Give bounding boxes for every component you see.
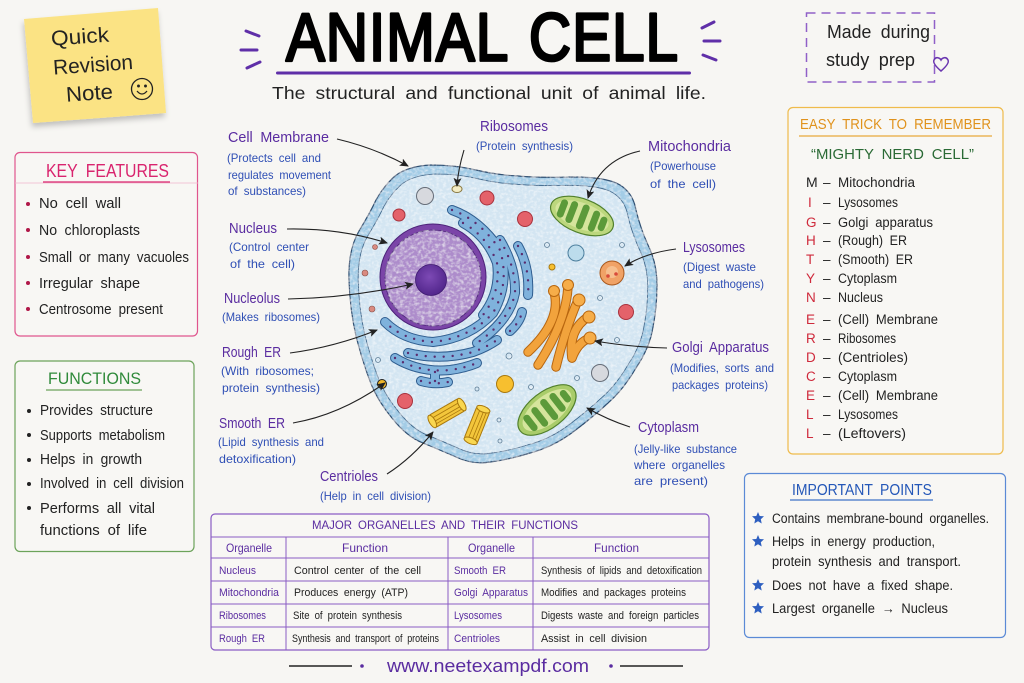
table rows: Rough ER <box>219 633 265 645</box>
bullet list: functions <box>27 403 184 539</box>
panel: easy trick to remember <box>788 108 1003 454</box>
table header <box>226 541 639 555</box>
points list: Helps in energy production, <box>772 534 935 549</box>
mnemonic list: (Centrioles) <box>838 350 908 365</box>
table: major organelles and their functions <box>211 514 709 650</box>
mnemonic list: (Smooth) ER <box>838 252 913 267</box>
sticky note: quick revision note: Quick <box>50 24 110 51</box>
label: cytoplasm: where organelles <box>633 458 725 472</box>
label: centrioles: Centrioles <box>320 469 378 485</box>
label: lysosomes: and pathogens) <box>683 277 764 291</box>
label: nucleus <box>229 221 309 271</box>
bullet list: functions: Involved in cell division <box>40 476 184 492</box>
icon: heart <box>934 58 948 71</box>
cell membrane <box>349 165 657 463</box>
label: rough ER: Rough ER <box>222 345 281 361</box>
panel: functions <box>15 361 194 552</box>
table rows: Digests waste and foreign particles <box>541 610 699 622</box>
table rows: Golgi Apparatus <box>454 587 528 599</box>
label: cell membrane: (Protects cell and <box>227 151 321 165</box>
label: ribosomes: Ribosomes <box>480 119 548 135</box>
centrioles <box>426 397 491 446</box>
label: smooth ER: (Lipid synthesis and <box>218 435 324 449</box>
nucleus <box>380 224 486 330</box>
note: made during study prep: study prep <box>826 50 915 70</box>
label: ribosomes: (Protein synthesis) <box>476 139 573 153</box>
label: golgi apparatus: packages proteins) <box>672 378 768 392</box>
table rows <box>219 565 702 645</box>
table rows: Ribosomes <box>219 610 266 622</box>
mnemonic list: – <box>823 215 831 230</box>
mnemonic list: D <box>806 350 816 365</box>
panel: important points: IMPORTANT POINTS <box>792 482 932 499</box>
table header: Function <box>594 541 639 555</box>
mnemonic list: – <box>823 426 831 441</box>
mnemonic heading: “MIGHTY NERD CELL” <box>811 147 974 163</box>
mitochondrion lower <box>509 375 585 445</box>
points list: protein synthesis and transport. <box>772 554 961 569</box>
mnemonic list: (Rough) ER <box>838 233 907 248</box>
bullet list: key features: No chloroplasts <box>39 223 140 239</box>
label: mitochondria: Mitochondria <box>648 139 732 155</box>
table rows: Nucleus <box>219 565 256 577</box>
bullet list: functions: Performs all vital <box>40 501 155 517</box>
arrows <box>287 139 676 474</box>
mnemonic list: – <box>823 233 831 248</box>
icon: stars <box>752 512 764 614</box>
icon: title accent strokes <box>241 22 720 68</box>
bullet list: key features <box>26 196 189 318</box>
label: golgi apparatus: (Modifies, sorts and <box>670 361 774 375</box>
label: cell membrane <box>227 130 332 198</box>
bullet list: key features: Small or many vacuoles <box>39 250 189 266</box>
table header: Function <box>342 541 388 555</box>
label: rough ER: (With ribosomes; <box>221 364 314 378</box>
table rows: Produces energy (ATP) <box>294 587 408 599</box>
panel: key features: KEY FEATURES <box>46 161 169 181</box>
table header: Organelle <box>468 541 515 555</box>
table rows: Lysosomes <box>454 610 502 622</box>
label: rough ER <box>221 345 320 395</box>
bullet list: functions: Provides structure <box>40 403 153 419</box>
sticky note: quick revision note: Note <box>65 80 114 107</box>
mnemonic list: I <box>808 195 812 210</box>
mnemonic list: E <box>806 312 815 327</box>
table rows: Synthesis and transport of proteins <box>292 633 439 645</box>
panel: functions: FUNCTIONS <box>48 369 141 388</box>
table rows: Control center of the cell <box>294 565 421 577</box>
bullet list: functions: Helps in growth <box>40 452 142 468</box>
table rows: Site of protein synthesis <box>293 610 402 622</box>
golgi apparatus <box>528 280 596 367</box>
table: major organelles and their functions: MAJOR ORGANELLES AND THEIR FUNCTIONS <box>312 520 578 532</box>
mnemonic list: – <box>823 271 831 286</box>
title underline <box>276 72 691 74</box>
points list <box>772 511 989 616</box>
cytoplasm <box>358 174 648 454</box>
mnemonic list: (Cell) Membrane <box>838 388 938 403</box>
mnemonic list: G <box>806 215 817 230</box>
mnemonic list: L <box>806 407 814 422</box>
mnemonic list: – <box>823 369 831 384</box>
label: lysosomes: Lysosomes <box>683 240 745 256</box>
mnemonic list: – <box>823 175 831 190</box>
label: cytoplasm: (Jelly-like substance <box>634 442 737 456</box>
mnemonic list: – <box>823 407 831 422</box>
rough and smooth ER <box>385 210 528 383</box>
points list: Contains membrane-bound organelles. <box>772 511 989 526</box>
mnemonic list: (Leftovers) <box>838 426 906 441</box>
mnemonic list: E <box>806 388 815 403</box>
mnemonic list: (Cell) Membrane <box>838 312 938 327</box>
label: nucleus: of the cell) <box>230 257 295 271</box>
mnemonic list: L <box>806 426 814 441</box>
panel: key features <box>15 152 198 336</box>
label: cell membrane: of substances) <box>228 184 306 198</box>
panel: important points <box>744 474 1006 638</box>
label: smooth ER: detoxification) <box>219 452 296 466</box>
vesicles and ribosomes <box>362 186 634 443</box>
table header: Organelle <box>226 541 272 555</box>
label: mitochondria: (Powerhouse <box>650 159 716 173</box>
mnemonic list: Ribosomes <box>838 331 896 346</box>
mnemonic list: – <box>823 350 831 365</box>
table rows: Centrioles <box>454 633 500 645</box>
label: centrioles <box>320 469 431 503</box>
mnemonic list: – <box>823 252 831 267</box>
points list: Does not have a fixed shape. <box>772 578 953 593</box>
mnemonic list: Lysosomes <box>838 407 898 422</box>
label: nucleus: Nucleus <box>229 221 277 237</box>
label: centrioles: (Help in cell division) <box>320 489 431 503</box>
label: golgi apparatus: Golgi Apparatus <box>672 340 769 356</box>
table rows: Mitochondria <box>219 587 280 599</box>
label: lysosomes <box>683 240 764 291</box>
mnemonic list: T <box>806 252 814 267</box>
label: nucleolus <box>222 291 320 324</box>
diagram: animal cell <box>349 165 657 463</box>
lysosome <box>600 261 624 285</box>
bullet list: key features: Centrosome present <box>39 302 163 318</box>
note: made during study prep: Made during <box>827 22 930 42</box>
nucleolus <box>416 264 446 296</box>
label: cytoplasm: Cytoplasm <box>638 420 699 436</box>
label: mitochondria: of the cell) <box>650 177 716 191</box>
mnemonic list: – <box>823 290 831 305</box>
mnemonic list: Lysosomes <box>838 195 898 210</box>
bullet list: functions: Supports metabolism <box>40 428 165 444</box>
mnemonic list: R <box>806 331 816 346</box>
golgi bulbs <box>548 280 596 344</box>
bullet list: key features: Irregular shape <box>39 276 140 292</box>
label: smooth ER: Smooth ER <box>219 416 285 432</box>
subtitle: The structural and functional unit of animal life. <box>272 83 706 103</box>
note: made during study prep <box>806 13 948 82</box>
mnemonic list: Mitochondria <box>838 175 915 190</box>
mnemonic list: – <box>823 195 831 210</box>
footer website <box>289 656 683 676</box>
label: ribosomes <box>476 119 573 153</box>
bullet list: key features: No cell wall <box>39 196 121 212</box>
table rows: Assist in cell division <box>541 633 647 645</box>
title: ANIMAL CELL <box>286 1 678 76</box>
mnemonic list: H <box>806 233 816 248</box>
mnemonic list: – <box>823 388 831 403</box>
label: cell membrane: regulates movement <box>228 168 332 182</box>
label: nucleolus: (Makes ribosomes) <box>222 310 320 324</box>
label: nucleus: (Control center <box>229 240 309 254</box>
sticky note: quick revision note <box>24 8 166 123</box>
table rows: Smooth ER <box>454 565 506 577</box>
mitochondrion upper <box>545 188 619 244</box>
label: rough ER: protein synthesis) <box>222 381 320 395</box>
icon: smiley <box>132 78 152 100</box>
label: smooth ER <box>218 416 324 466</box>
mnemonic list: Nucleus <box>838 290 883 305</box>
label: cytoplasm <box>633 420 737 488</box>
mnemonic list: C <box>806 369 816 384</box>
footer website: www.neetexampdf.com <box>386 656 589 676</box>
mnemonic list: – <box>823 331 831 346</box>
label: nucleolus: Nucleolus <box>224 291 280 307</box>
label: golgi apparatus <box>670 340 774 392</box>
panel: easy trick to remember: EASY TRICK TO REMEMBER <box>800 116 991 133</box>
mnemonic list: Y <box>806 271 815 286</box>
label: lysosomes: (Digest waste <box>683 260 756 274</box>
mnemonic list: N <box>806 290 816 305</box>
mnemonic list: Cytoplasm <box>838 271 897 286</box>
mnemonic list <box>806 174 938 441</box>
bullet list: functions: functions of life <box>40 523 147 539</box>
table rows: Modifies and packages proteins <box>541 587 686 599</box>
sticky note: quick revision note: Revision <box>52 51 134 80</box>
mnemonic list: M <box>806 174 818 190</box>
mnemonic list: – <box>823 312 831 327</box>
label: cell membrane: Cell Membrane <box>228 130 329 146</box>
table rows: Synthesis of lipids and detoxification <box>541 565 702 577</box>
points list: Largest organelle → Nucleus <box>772 601 948 616</box>
label: mitochondria <box>648 139 732 191</box>
label: cytoplasm: are present) <box>634 474 708 488</box>
mnemonic list: Cytoplasm <box>838 369 897 384</box>
mnemonic list: Golgi apparatus <box>838 215 933 230</box>
